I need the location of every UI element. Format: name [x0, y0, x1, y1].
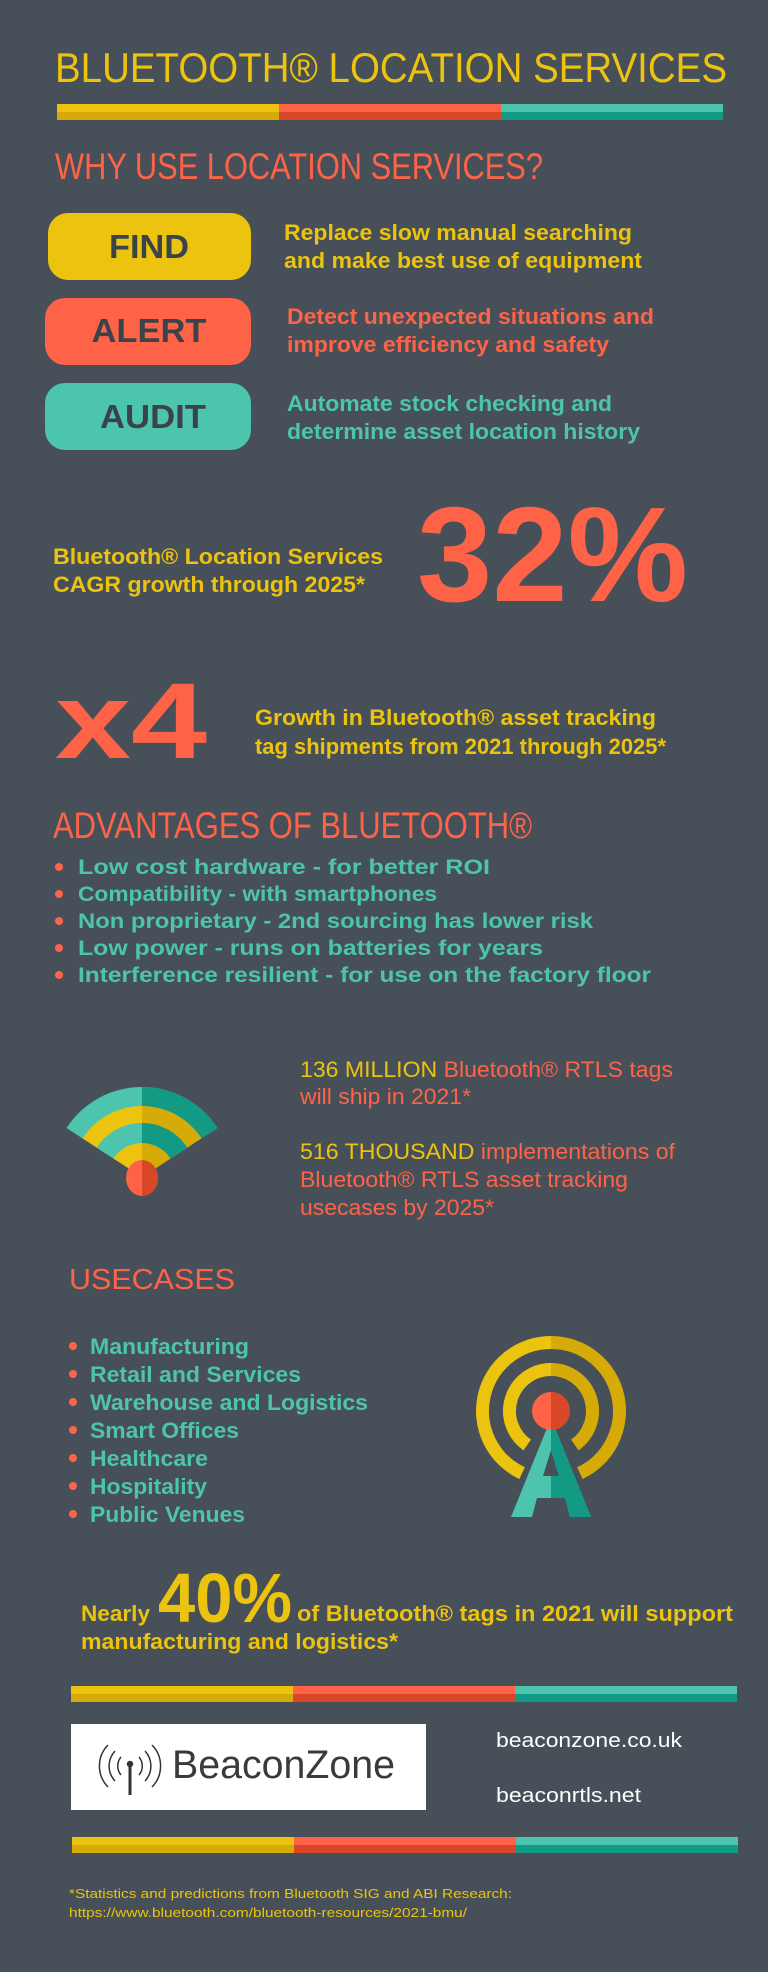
list: advantages: Low cost hardware - for better ROI	[78, 856, 490, 879]
text: alert description: improve efficiency and safety	[287, 332, 610, 357]
heading: advantages: ADVANTAGES OF BLUETOOTH®	[53, 805, 532, 846]
icon: antenna	[99, 1745, 161, 1795]
stat text: tag shipments: Growth in Bluetooth® asset tracking	[255, 705, 656, 730]
stat text: nearly 40%: Nearly	[81, 1601, 151, 1626]
list: usecases: Healthcare	[90, 1446, 208, 1471]
pill: audit	[45, 383, 251, 450]
text: audit description: determine asset location history	[287, 419, 641, 444]
stat text: nearly 40%: 40%	[158, 1559, 292, 1637]
big number: 32%: 32%	[417, 479, 688, 630]
heading: usecases: USECASES	[69, 1264, 235, 1296]
stat text: tag shipments	[255, 705, 666, 759]
pill: alert	[45, 298, 251, 365]
row: alert	[45, 298, 654, 365]
pill: alert: ALERT	[92, 312, 206, 349]
stat text: RTLS tags: usecases by 2025*	[300, 1195, 494, 1220]
list: usecases: Warehouse and Logistics	[90, 1390, 368, 1415]
text: audit description: Automate stock checking and	[287, 391, 612, 416]
list: usecases: Public Venues	[90, 1502, 245, 1527]
text: find description: Replace slow manual searching	[284, 220, 632, 245]
list: advantages: Non proprietary - 2nd sourcing has lower risk	[78, 910, 593, 933]
stat text: CAGR: CAGR growth through 2025*	[53, 572, 365, 597]
list: advantages	[55, 856, 651, 987]
color bar bottom	[72, 1837, 738, 1853]
footnote: *Statistics and predictions from Bluetooth SIG and ABI Research:	[69, 1886, 512, 1901]
list: usecases: Retail and Services	[90, 1362, 301, 1387]
stat text: RTLS tags	[299, 1057, 676, 1220]
links	[496, 1730, 683, 1807]
list: advantages: Compatibility - with smartphones	[78, 883, 437, 906]
list: advantages: Low power - runs on batteries for years	[78, 937, 543, 960]
row: audit	[45, 383, 641, 450]
links: beaconzone.co.uk	[496, 1730, 683, 1752]
stat text: RTLS tags: 136 MILLION Bluetooth® RTLS tags	[300, 1057, 673, 1082]
list: usecases: Manufacturing	[90, 1334, 249, 1359]
stat text: nearly 40%: manufacturing and logistics*	[81, 1629, 398, 1654]
list: usecases: Hospitality	[90, 1474, 208, 1499]
list: advantages: Interference resilient - for use on the factory floor	[78, 964, 651, 987]
heading: why use location services: WHY USE LOCATION SERVICES?	[55, 146, 543, 187]
icon: radio tower	[483, 1342, 619, 1517]
footnote: https://www.bluetooth.com/bluetooth-resources/2021-bmu/	[69, 1905, 467, 1920]
links: beaconrtls.net	[496, 1785, 642, 1807]
pill: find	[48, 213, 251, 280]
list: usecases: Smart Offices	[90, 1418, 239, 1443]
text: audit description	[287, 391, 641, 444]
pill: audit: AUDIT	[100, 398, 206, 435]
text: find description: and make best use of equipment	[284, 248, 643, 273]
stat text: nearly 40%: of Bluetooth® tags in 2021 will support	[297, 1601, 734, 1626]
color bar middle	[71, 1686, 737, 1702]
footnote	[69, 1886, 512, 1920]
stat text: RTLS tags: Bluetooth® RTLS asset tracking	[300, 1167, 628, 1192]
big number: x4: x4	[55, 660, 207, 781]
list: usecases	[69, 1334, 368, 1527]
stat text: CAGR	[53, 544, 383, 597]
stat text: nearly 40%	[81, 1559, 734, 1654]
text: find description	[284, 220, 643, 273]
stat text: CAGR: Bluetooth® Location Services	[53, 544, 383, 569]
color bar top	[57, 104, 723, 120]
text: alert description: Detect unexpected situations and	[287, 304, 654, 329]
text: alert description	[287, 304, 654, 357]
icon: wifi fan	[66, 1087, 218, 1196]
pill: find: FIND	[109, 228, 189, 265]
stat text: tag shipments: tag shipments from 2021 through 2025*	[255, 734, 666, 759]
stat text: RTLS tags: 516 THOUSAND implementations of	[300, 1139, 676, 1164]
stat text: RTLS tags: will ship in 2021*	[299, 1084, 471, 1109]
row: find	[48, 213, 643, 280]
logo: BeaconZone	[71, 1724, 426, 1810]
logo: BeaconZone: BeaconZone	[172, 1743, 395, 1787]
title: BLUETOOTH® LOCATION SERVICES	[55, 44, 727, 91]
